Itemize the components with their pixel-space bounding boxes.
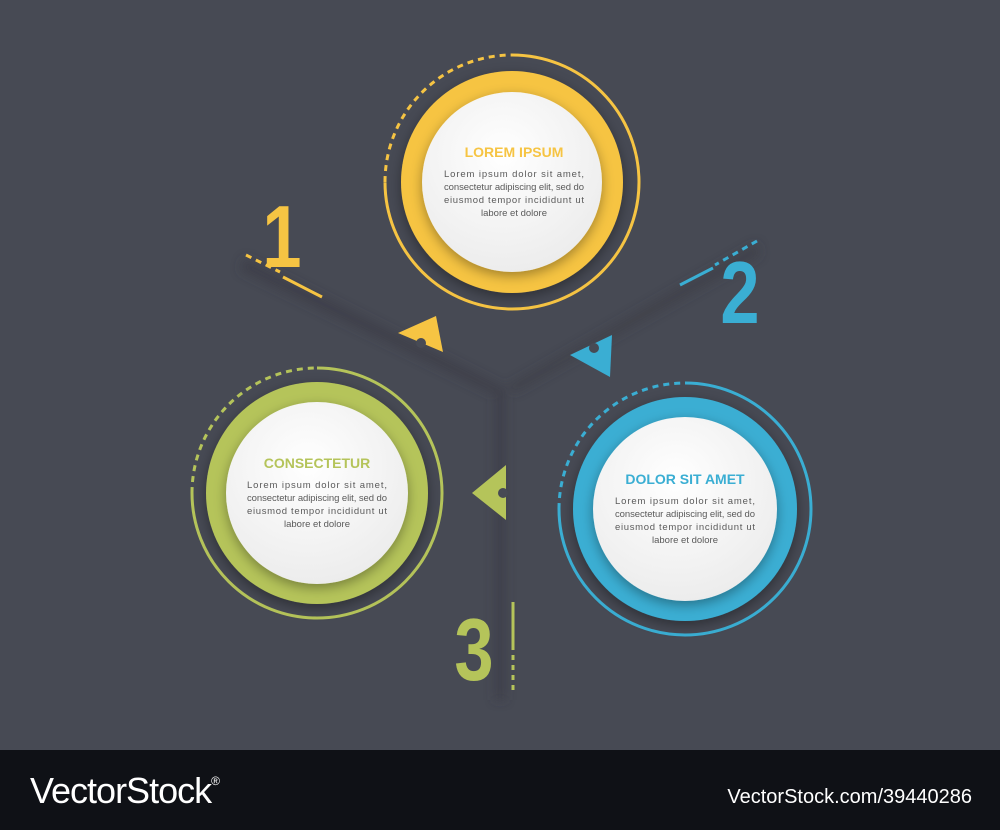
panel: dolor sit amet (blue): consectetur adipiscing elit, sed do — [615, 509, 755, 520]
panel: dolor sit amet (blue) — [559, 383, 811, 635]
panel: consectetur (green): labore et dolore — [284, 519, 350, 530]
panel: dolor sit amet (blue): labore et dolore — [652, 535, 718, 546]
panel: consectetur (green): eiusmod tempor incididunt ut — [247, 506, 387, 517]
panel: lorem ipsum (yellow): LOREM IPSUM — [465, 144, 563, 160]
panel: dolor sit amet (blue): Lorem ipsum dolor sit amet, — [615, 496, 755, 507]
panel: consectetur (green): Lorem ipsum dolor sit amet, — [247, 480, 387, 491]
panel: dolor sit amet (blue): eiusmod tempor incididunt ut — [615, 522, 755, 533]
number 2 — [680, 241, 760, 342]
number 3: 3 — [454, 600, 494, 699]
number 1: 1 — [262, 187, 302, 286]
footer bar: VectorStock — [30, 770, 211, 811]
footer bar — [0, 750, 1000, 830]
panel: lorem ipsum (yellow): Lorem ipsum dolor sit amet, — [444, 169, 584, 180]
number 1 — [246, 187, 322, 297]
panel: consectetur (green) — [192, 368, 442, 618]
fold shading — [240, 243, 760, 700]
panel: lorem ipsum (yellow): eiusmod tempor incididunt ut — [444, 195, 584, 206]
number 2: 2 — [720, 243, 760, 342]
footer bar: VectorStock.com/39440286 — [727, 786, 972, 808]
panel: consectetur (green): CONSECTETUR — [264, 455, 370, 471]
panel: lorem ipsum (yellow) — [385, 55, 639, 309]
footer bar: ® — [211, 774, 220, 788]
arrow: green triangle — [472, 465, 508, 520]
panel: consectetur (green): consectetur adipiscing elit, sed do — [247, 493, 387, 504]
panel: lorem ipsum (yellow): consectetur adipiscing elit, sed do — [444, 182, 584, 193]
panel: lorem ipsum (yellow): labore et dolore — [481, 208, 547, 219]
panel: dolor sit amet (blue): DOLOR SIT AMET — [625, 471, 745, 487]
arrow: blue triangle — [570, 335, 612, 377]
number 3 — [454, 600, 513, 699]
arrow: yellow triangle — [398, 316, 443, 352]
